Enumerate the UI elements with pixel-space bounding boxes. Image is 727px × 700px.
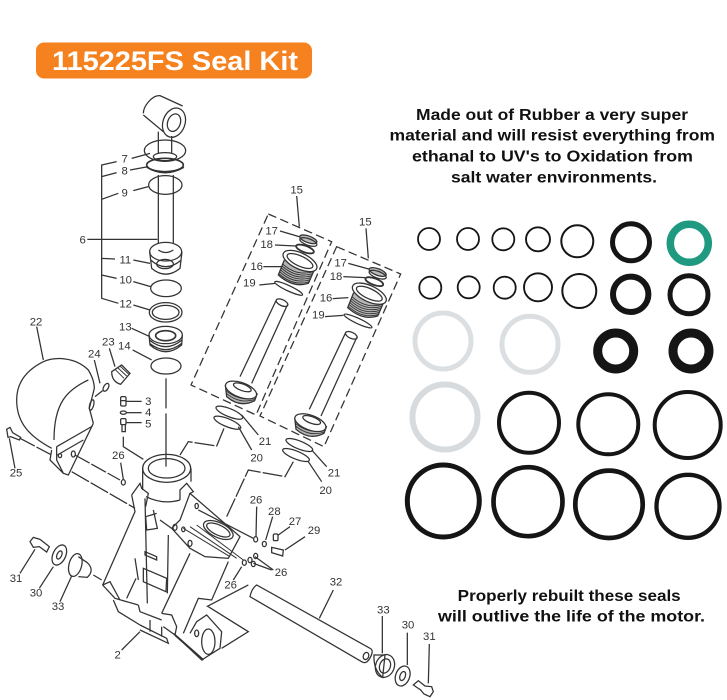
upper cylinder assembly: 19 <box>243 278 256 290</box>
lower bracket assembly: 20 <box>250 453 263 465</box>
row 2 rings <box>419 273 708 314</box>
upper cylinder assembly: 23 <box>102 337 115 349</box>
upper cylinder assembly: 13 <box>119 322 132 334</box>
lower bracket assembly: 21 <box>259 436 271 448</box>
upper cylinder assembly: 10 <box>119 274 132 286</box>
upper cylinder assembly: 18 <box>260 239 273 251</box>
upper cylinder assembly: 11 <box>119 254 131 266</box>
upper cylinder assembly: 16 <box>320 293 332 305</box>
upper cylinder assembly: 15 <box>359 217 372 229</box>
lower bracket assembly: 33 <box>377 604 390 616</box>
bottom description text: Properly rebuilt these seals <box>458 588 681 605</box>
lower bracket assembly: 30 <box>30 588 42 600</box>
row 5 rings <box>407 465 720 538</box>
lower bracket assembly: 26 <box>224 580 237 592</box>
upper cylinder assembly: 12 <box>119 299 132 311</box>
upper cylinder assembly: 14 <box>118 340 131 352</box>
top description text: salt water environments. <box>451 169 657 186</box>
lower bracket assembly: 2 <box>115 650 121 662</box>
upper cylinder assembly: 8 <box>122 166 128 178</box>
upper cylinder assembly: 17 <box>334 258 347 270</box>
upper cylinder assembly: 9 <box>122 188 128 200</box>
lower bracket assembly: 26 <box>112 450 125 462</box>
upper cylinder assembly: 7 <box>122 154 128 166</box>
lower bracket assembly: 29 <box>308 525 320 537</box>
lower bracket assembly: 20 <box>319 485 332 497</box>
upper cylinder assembly <box>30 96 401 447</box>
lower bracket assembly: 33 <box>52 601 64 613</box>
lower bracket assembly <box>7 358 436 697</box>
bottom description text <box>437 588 705 626</box>
lower bracket assembly: 31 <box>423 631 436 643</box>
lower bracket assembly: 26 <box>275 567 287 579</box>
lower bracket assembly: 31 <box>10 573 22 585</box>
top description text: Made out of Rubber a very super <box>416 107 688 124</box>
upper cylinder assembly: 17 <box>265 226 278 238</box>
lower bracket assembly: 30 <box>402 619 414 631</box>
bottom description text: will outlive the life of the motor. <box>437 609 705 626</box>
top description text: ethanal to UV's to Oxidation from <box>412 149 693 166</box>
lower bracket assembly: 3 <box>145 396 151 408</box>
top description text <box>390 107 715 186</box>
exploded parts diagram <box>7 96 436 697</box>
lower bracket assembly: 4 <box>145 407 151 419</box>
lower bracket assembly: 26 <box>250 494 262 506</box>
upper cylinder assembly: 15 <box>290 184 303 196</box>
top description text: material and will resist everything from <box>390 128 715 145</box>
upper cylinder assembly: 22 <box>30 317 42 329</box>
upper cylinder assembly: 24 <box>88 349 101 361</box>
row 3 rings <box>415 313 709 372</box>
upper cylinder assembly: 18 <box>330 271 342 283</box>
title badge: 115225FS Seal Kit <box>52 46 298 76</box>
lower bracket assembly: 27 <box>289 516 301 528</box>
lower bracket assembly: 25 <box>10 468 22 480</box>
row 1 rings <box>418 224 708 262</box>
lower bracket assembly: 21 <box>328 468 340 480</box>
lower bracket assembly: 32 <box>330 577 342 589</box>
seal rings <box>407 224 721 538</box>
upper cylinder assembly: 19 <box>312 310 325 322</box>
row 4 rings <box>412 384 721 458</box>
upper cylinder assembly: 16 <box>250 261 263 273</box>
lower bracket assembly: 28 <box>268 506 281 518</box>
upper cylinder assembly: 6 <box>80 234 86 246</box>
title badge <box>36 42 312 78</box>
lower bracket assembly: 5 <box>145 418 151 430</box>
